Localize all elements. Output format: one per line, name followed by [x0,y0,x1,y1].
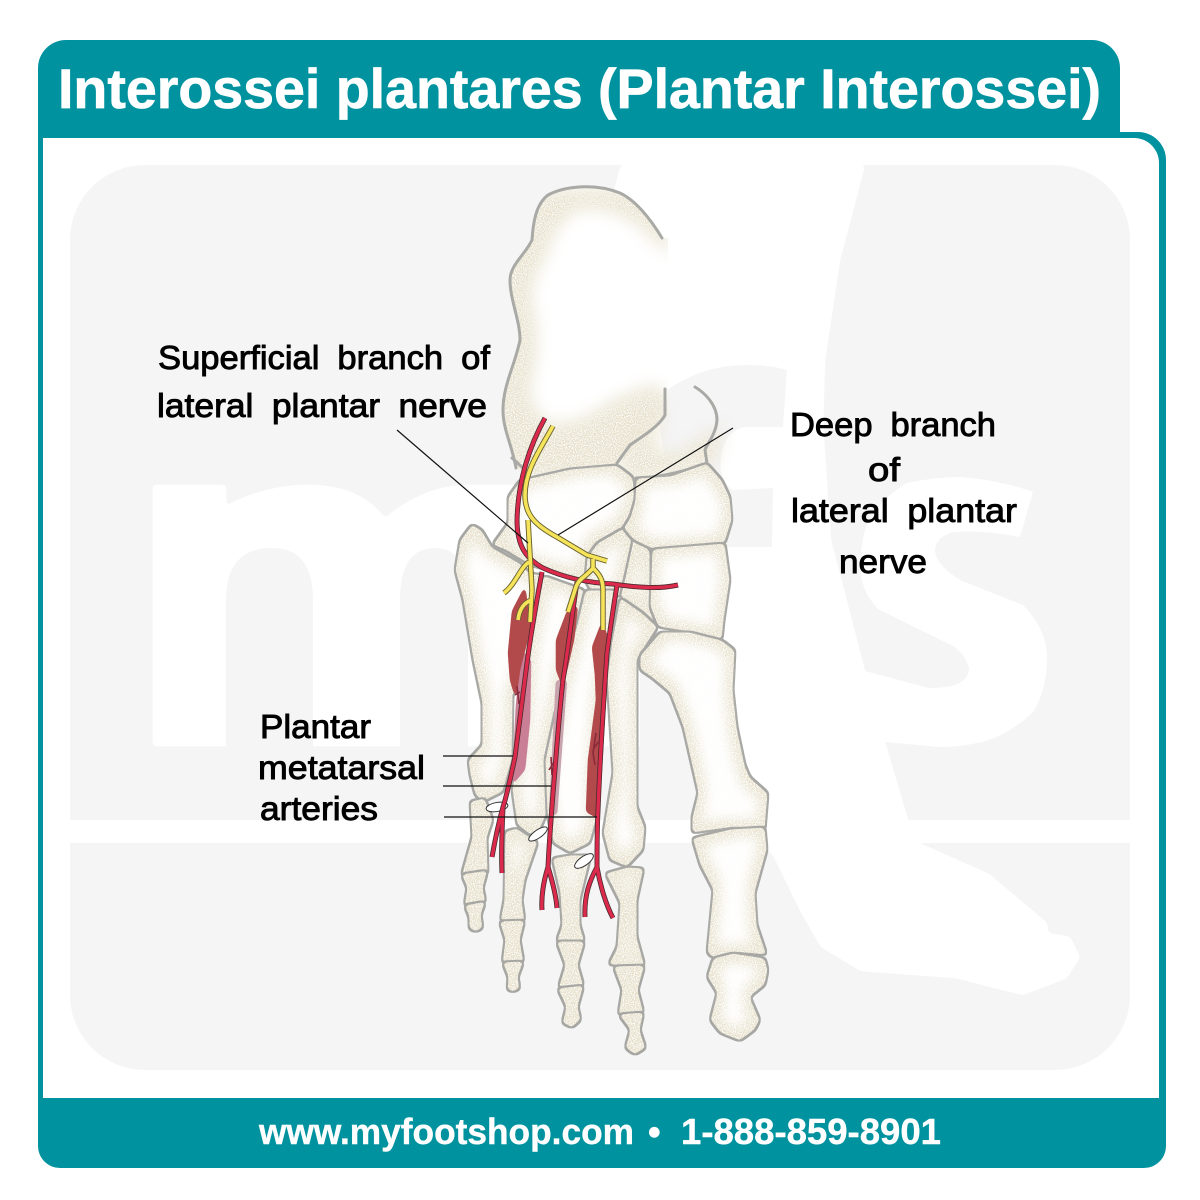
label: plantar metatarsal arteries: metatarsal [258,749,425,786]
bone: intermediate cuneiform [620,528,658,627]
muscle: first tendon [512,650,531,785]
bone: fifth metatarsal [455,524,543,802]
label: deep branch: Deep branch [790,406,996,443]
label: deep branch [790,406,1017,580]
bone: big toe proximal phalanx [692,827,767,958]
bone: fifth toe phalanges [461,798,493,932]
muscle: second [556,605,578,688]
bone: talus outline [617,387,717,478]
bone: third toe phalanges [552,855,591,1028]
footer contact: 1-888-859-8901 [681,1111,941,1152]
watermark logo [70,165,1130,1070]
muscle: first [508,586,531,700]
label: superficial branch: lateral plantar nerve [157,387,487,424]
label: deep branch: nerve [839,543,927,580]
label: plantar metatarsal arteries: Plantar [260,708,371,745]
bone: medial cuneiform [623,463,732,549]
bone: calcaneus outline [503,187,662,468]
bone: big toe distal phalanx [707,953,768,1041]
label: plantar metatarsal arteries: arteries [260,790,378,827]
label: deep branch: of [868,451,901,488]
bone: third metatarsal [545,590,617,853]
label: deep branch: lateral plantar [791,492,1017,529]
title: Interossei plantares (Plantar Interossei) [58,57,1101,120]
bone: first metatarsal [640,632,768,833]
bone: lateral cuneiform [585,528,633,597]
arteries [492,418,678,918]
bone: second metatarsal [603,597,658,867]
label: superficial branch [157,339,491,424]
bone: first cuneiform base [650,543,730,640]
leader lines [397,428,733,817]
nerves [504,426,607,630]
footer contact: • [648,1111,661,1152]
bone: cuboid [492,465,635,580]
foot skeleton [455,187,768,1055]
small vessels [515,686,600,775]
muscle: second tendon [549,680,567,815]
bone: second toe phalanges [605,867,646,1055]
footer contact [258,1111,941,1152]
bone: talus shading [618,405,724,482]
muscle: third [586,621,609,819]
label: plantar metatarsal arteries [258,708,425,827]
footer contact: www.myfootshop.com [258,1111,634,1152]
label: superficial branch: Superficial branch of [158,339,491,376]
bone: calcaneus shading [495,190,672,480]
bone: fourth toe phalanges [499,828,538,992]
interosseous muscles [508,586,609,819]
joint capsules [485,801,596,871]
bone: calcaneus fill [503,187,668,478]
bone: fourth metatarsal [512,575,585,835]
